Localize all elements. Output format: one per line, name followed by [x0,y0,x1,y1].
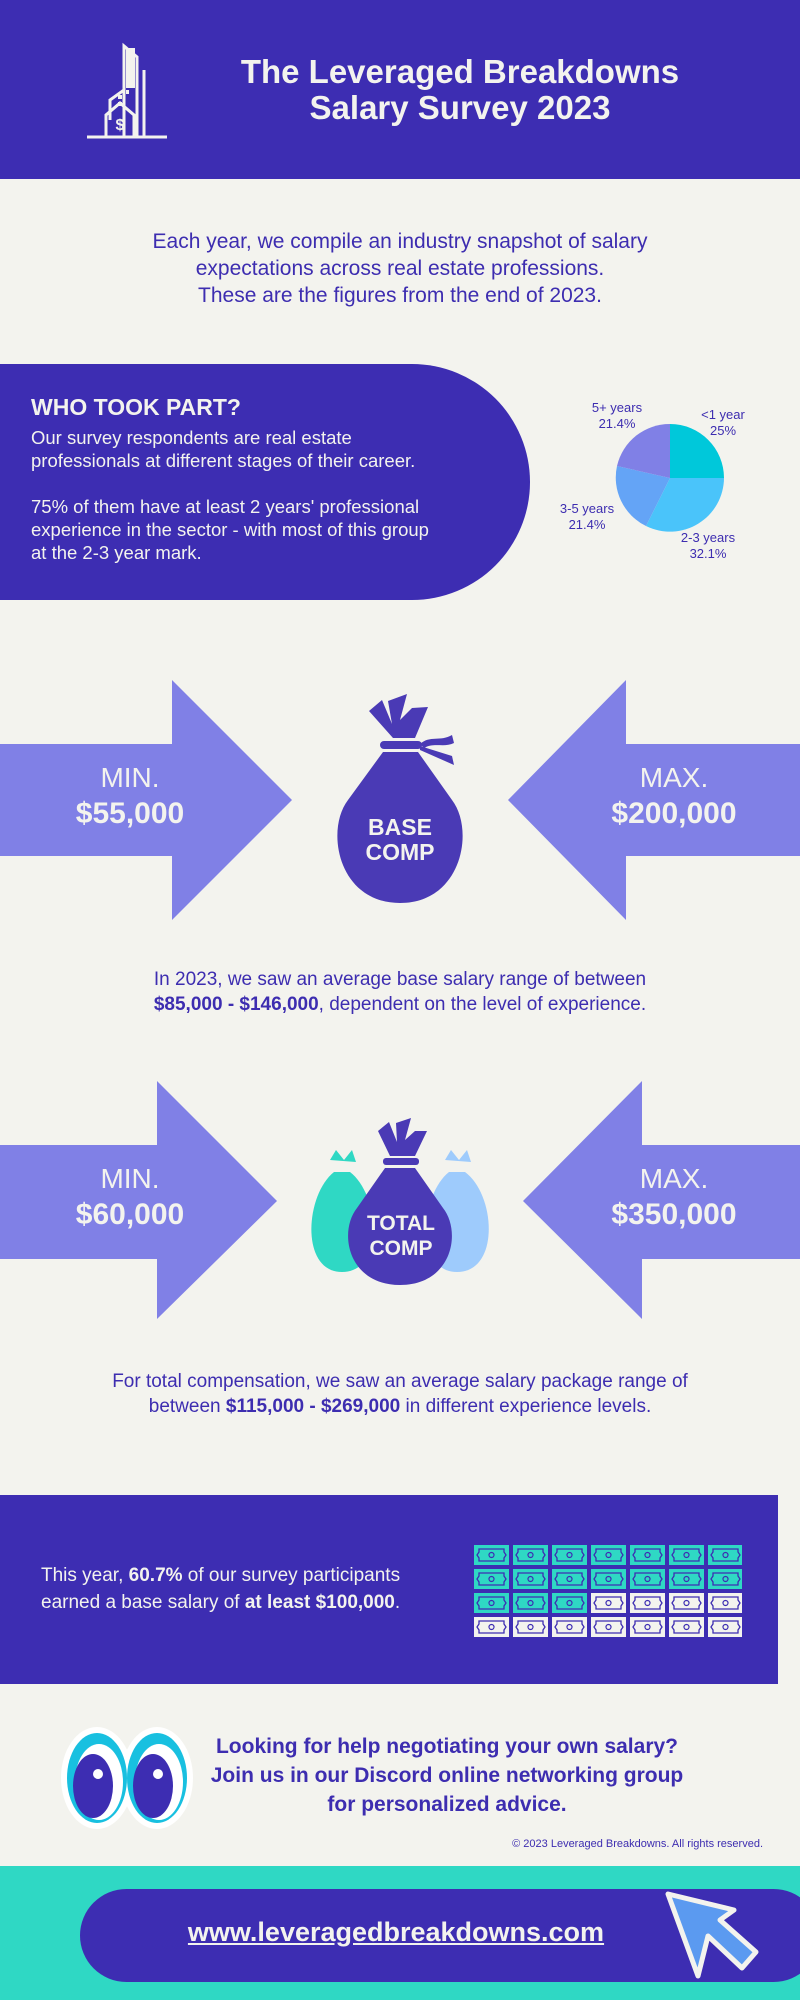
arrow: total max [523,1081,800,1319]
pie chart: experience: 3-5 years [560,501,615,516]
icon: money bag base comp [337,694,463,903]
icon: money bag base comp: BASE [368,814,432,840]
title: Salary Survey 2023 [310,89,610,126]
arrow: base min: MIN. [100,762,160,793]
pie chart: experience: <1 year [701,407,746,422]
arrow: base max: MAX. [640,762,708,793]
text block: discord cta: for personalized advice. [327,1793,567,1816]
pie chart: experience: 21.4% [599,416,636,431]
intro text: Each year, we compile an industry snapshot of salary [153,230,647,253]
arrow: total min: MIN. [100,1163,160,1194]
text block: respondents: at the 2-3 year mark. [31,542,202,563]
pie chart: experience: 5+ years [592,400,643,415]
icon: building with dollar: $ [116,117,125,134]
arrow: total min [0,1081,277,1319]
text block: discord cta [211,1735,683,1816]
arrow: base max: $200,000 [611,797,737,830]
title: The Leveraged Breakdowns [241,53,679,90]
footer band [0,1866,800,2000]
text block: respondents [31,427,429,563]
icon: eyes [61,1727,193,1829]
intro text: expectations across real estate professions. [196,257,604,280]
arrow: base max [508,680,800,920]
icon: building with dollar [87,42,167,138]
intro text [153,230,648,307]
pie chart: experience: 21.4% [569,517,606,532]
icon: money bag base comp: COMP [366,839,434,865]
text block: respondents: 75% of them have at least 2 years' professional [31,496,419,517]
pie chart: experience [560,400,746,561]
text block: total range: between $115,000 - $269,000 in different experience levels. [149,1396,651,1417]
text block: base range: $85,000 - $146,000, dependent on the level of experience. [154,994,646,1015]
arrow: total min: $60,000 [76,1198,184,1231]
text block: total range: For total compensation, we saw an average salary package range of [112,1371,688,1392]
chart: bill grid [474,1545,742,1637]
copyright: © 2023 Leveraged Breakdowns. All rights reserved. [512,1838,763,1850]
icon: three money bags total comp: TOTAL [367,1212,435,1235]
pie chart: experience: 32.1% [690,546,727,561]
url pill [80,1889,800,1982]
text block: stat: This year, 60.7% of our survey participants earned a base salary of at least $100,000. [41,1565,400,1613]
arrow: total max: MAX. [640,1163,708,1194]
header band [0,0,800,179]
icon: three money bags total comp [311,1118,489,1285]
text block: discord cta: Looking for help negotiating your own salary? [216,1735,678,1758]
pie chart: experience: 2-3 years [681,530,736,545]
text block: respondents: Our survey respondents are real estate [31,427,352,448]
arrow: total max: $350,000 [611,1198,737,1231]
pie chart: experience: 25% [710,423,736,438]
icon: three money bags total comp: COMP [370,1237,432,1260]
url text: www.leveragedbreakdowns.com [188,1917,604,1947]
text block: base range [154,969,646,1015]
title [241,53,679,126]
heading: who took part: WHO TOOK PART? [31,394,241,420]
icon: cursor [666,1892,758,1978]
panel: 60.7% stat [0,1495,778,1684]
intro text: These are the figures from the end of 2023. [198,284,602,307]
text block: respondents: experience in the sector - with most of this group [31,519,429,540]
text block: discord cta: Join us in our Discord online networking group [211,1764,683,1787]
text block: respondents: professionals at different stages of their career. [31,450,415,471]
text block: total range [112,1371,688,1417]
arrow: base min [0,680,292,920]
text block: base range: In 2023, we saw an average base salary range of between [154,969,646,990]
arrow: base min: $55,000 [76,797,184,830]
panel: who took part [0,364,530,600]
